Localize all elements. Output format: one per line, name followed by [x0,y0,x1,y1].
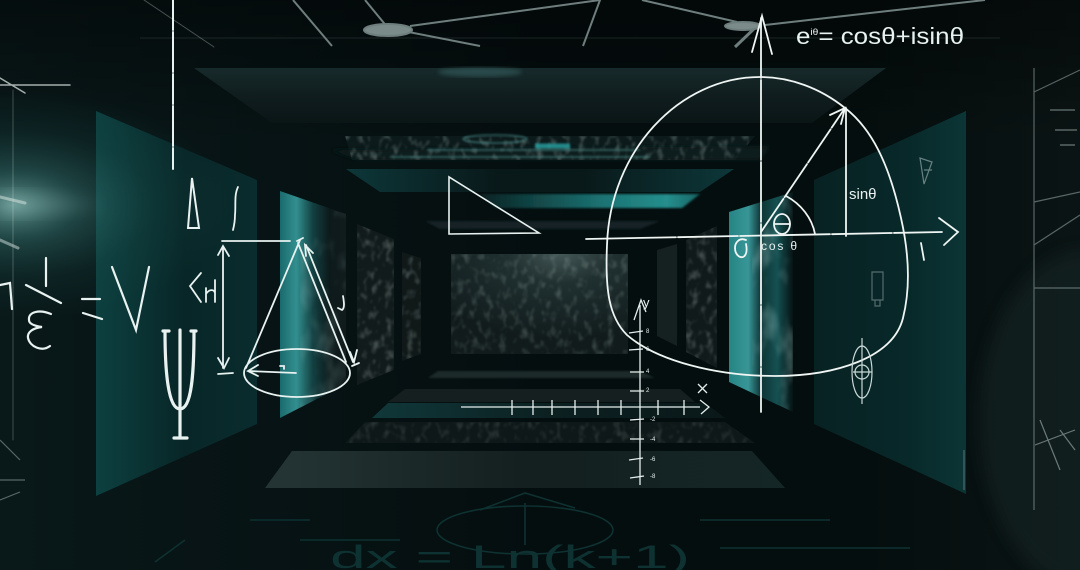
plot label y: y [643,295,650,310]
xy plot [461,300,709,485]
label: sin theta: sinθ [849,186,877,203]
label: cos theta: cos θ [761,239,797,253]
plot tick numbers: 2 [646,388,650,394]
formula: Euler: e [796,23,809,49]
plot tick numbers: 8 [646,329,650,335]
plot tick numbers: -8 [650,474,656,480]
right wall panels [657,111,966,494]
plot tick numbers: -2 [650,417,656,423]
floor panels [265,371,785,488]
formula: epsilon equals V [0,258,149,349]
plot tick numbers: 6 [646,347,650,353]
left light glow [0,90,230,320]
icon: integral glyph [233,187,238,230]
unit circle diagram [586,16,958,412]
top network lines [140,0,1000,47]
plot tick numbers: -4 [650,437,656,443]
small equipment sketches [852,158,964,490]
icon: triangle glyph [188,178,199,228]
plot tick numbers [646,329,656,480]
icon: psi [163,330,196,438]
right edge sketches [0,68,1080,510]
faint floor formulas [155,493,910,570]
triangle sketch [449,177,539,234]
ceiling panels [194,67,886,229]
cone [190,238,359,397]
left wall panels [96,111,421,496]
plot tick numbers: -6 [650,457,656,463]
left math drawings [0,0,359,440]
corridor back wall [451,254,628,354]
formula: Euler: iθ [810,27,818,37]
formula: Euler: = cosθ+isinθ [818,23,964,49]
plot tick numbers: 4 [646,369,650,375]
